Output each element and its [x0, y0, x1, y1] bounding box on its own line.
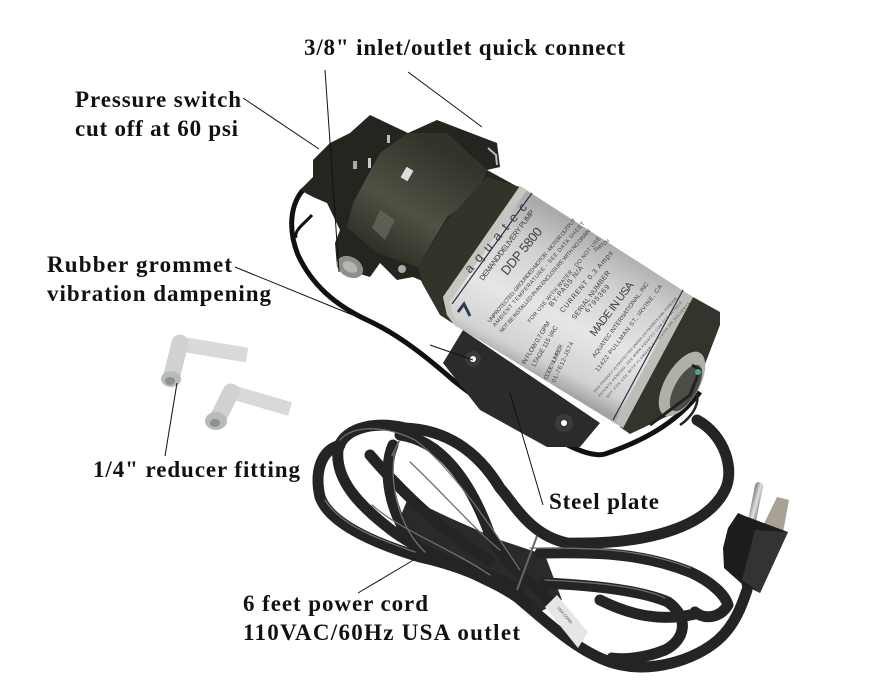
silver label: LTAGE 115 VAC: [531, 324, 560, 368]
label: steel plate: Steel plate: [549, 489, 659, 514]
silver label: 01-7E12-J574: [551, 341, 576, 384]
cord tag: USA CORD: [556, 605, 574, 625]
label: pressure switch: Pressure switch: [75, 87, 241, 112]
pump silhouette: [300, 115, 520, 297]
cord tag: [545, 595, 588, 648]
silver label: [443, 186, 693, 428]
leader line: reducer: [165, 383, 177, 456]
silver label: NOT BE INSTALLED IN AN ENCLOSURE WITH NO DRAIN: [499, 228, 592, 334]
silver label: AMBIENT TEMPERATURE - SEE DATA SHEET: [492, 221, 587, 328]
silver label: NOT FOR USE WITH FLAMMABLE LIQUIDS OR SOLVENTS: [606, 301, 691, 399]
silver label: IN FLOW 0.7 GPM: [521, 320, 552, 366]
silver label: SERIAL NUMBER: [571, 270, 612, 321]
silver label: 11422 PULLMAN ST, IRVINE, CA: [595, 284, 664, 373]
silver label: aquatec: [461, 199, 530, 276]
fitting: upper elbow: [161, 343, 247, 387]
leader line: power cord: [358, 558, 417, 593]
silver label: CURRENT 0.3 Amps: [559, 250, 615, 314]
label: power cord: 6 feet power cord: [243, 591, 428, 616]
silver label: THIS PRODUCT IS PROTECTED UNDER US PATENTS AND FOREIGN: [593, 296, 678, 394]
label: pressure switch: [75, 87, 241, 141]
silver label: UNPROTECTED, GROUNDED MOTOR - MOTOR OUTPUT: [487, 217, 578, 324]
silver label: DEMAND/DELIVERY PUMP: [477, 208, 536, 282]
fitting: lower elbow: [205, 392, 290, 430]
leader line: grommet: [235, 267, 473, 360]
inlet port: [333, 251, 406, 283]
plug: [723, 486, 789, 593]
label: rubber grommet: Rubber grommet: [47, 252, 232, 277]
mid body: [347, 133, 487, 267]
wires: [292, 190, 700, 455]
silver label: FOR USE WITH WATER - DO NOT USE: [527, 236, 602, 324]
label: reducer fitting: 1/4" reducer fitting: [93, 457, 300, 482]
motor end cap: [418, 177, 520, 330]
pump: [300, 115, 720, 434]
silver label: 6795369: [584, 284, 611, 314]
silver label: AQUATEC INTERNATIONAL, INC.: [592, 280, 651, 359]
label: rubber grommet: [47, 252, 272, 306]
label: power cord: 110VAC/60Hz USA outlet: [243, 620, 520, 645]
silver label: BY-PASS N/A: [548, 265, 585, 308]
cord bundle: [395, 498, 562, 612]
end cap: [649, 344, 715, 425]
label: power cord: [243, 591, 520, 645]
silver label: DDP 5800: [498, 224, 545, 278]
leader line: pressure switch: [243, 98, 319, 149]
steel plate: [443, 330, 600, 447]
label: rubber grommet: vibration dampening: [47, 281, 272, 306]
silver label: SWITCH: [593, 238, 611, 254]
silver label: PATENTS PENDING. SEE WWW.AQUATEC.COM FOR DETAILS: [598, 300, 683, 398]
leader line: outlet: [408, 72, 482, 127]
label: pressure switch: cut off at 60 psi: [75, 116, 239, 141]
end housing: [620, 297, 720, 434]
silver label: MADE IN USA: [588, 279, 637, 339]
leader line: inlet: [325, 70, 339, 272]
leader line: steel plate: [510, 393, 543, 505]
silver label: CODE NUMBER: [543, 343, 565, 381]
power cord: [318, 420, 747, 667]
label: inlet outlet: 3/8" inlet/outlet quick connect: [304, 35, 625, 60]
